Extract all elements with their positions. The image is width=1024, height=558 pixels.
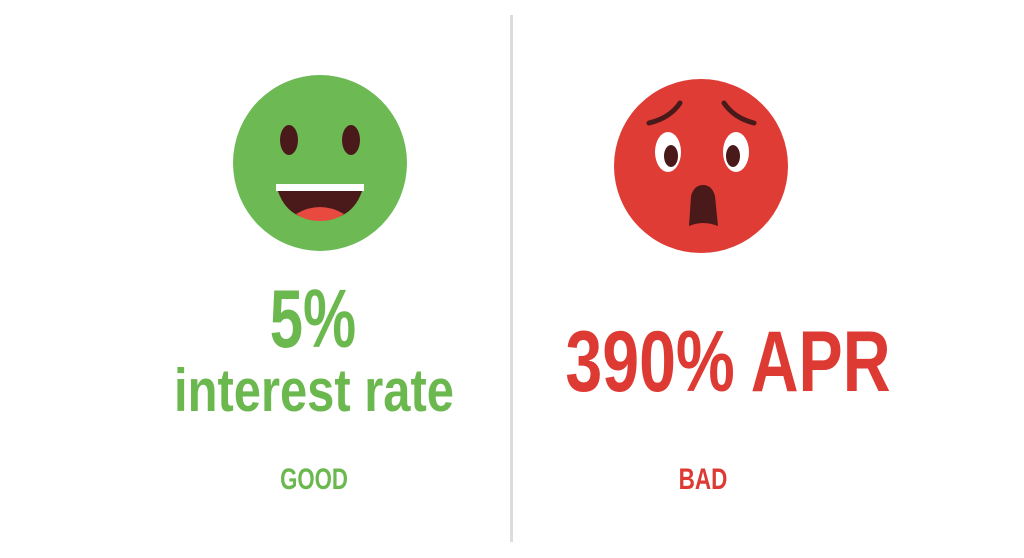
label: GOOD: GOOD <box>280 463 348 496</box>
text: 390% APR: 390% APR <box>565 314 891 410</box>
label: BAD: BAD <box>679 463 727 496</box>
text: 5%: 5% <box>270 272 356 365</box>
text: interest rate: interest rate <box>174 357 454 424</box>
divider <box>510 15 513 542</box>
